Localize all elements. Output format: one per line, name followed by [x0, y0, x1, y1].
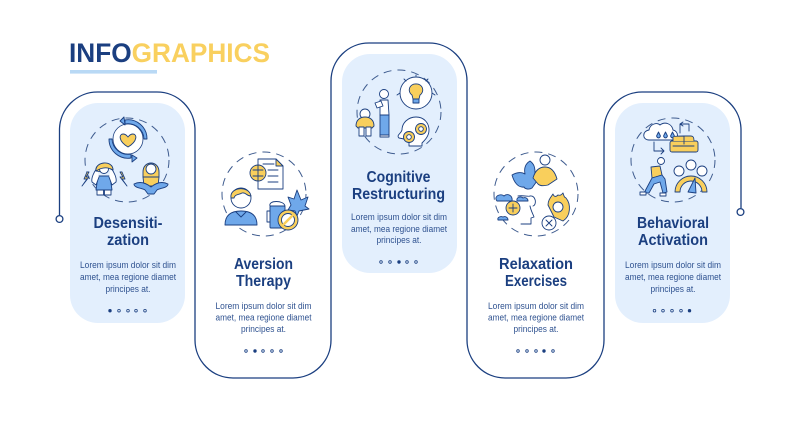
pagination dots — [653, 309, 691, 312]
text block: Lorem ipsum dolor sit dim — [488, 301, 584, 311]
text block: Lorem ipsum dolor sit dim — [216, 301, 312, 311]
text block: principes at. — [514, 324, 558, 334]
text block: principes at. — [376, 235, 422, 245]
text block: principes at. — [106, 284, 150, 294]
panel: Aversion Therapy — [216, 152, 312, 352]
text block — [351, 212, 447, 245]
heading: Behavioral — [637, 215, 709, 232]
heading — [499, 256, 573, 290]
text block: amet, mea regione diamet — [80, 272, 176, 282]
icon: relaxation — [494, 152, 578, 236]
panel: Behavioral Activation — [615, 103, 730, 323]
panel: Cognitive Restructuring — [342, 54, 457, 273]
pagination dots — [380, 261, 417, 263]
heading — [94, 215, 162, 249]
heading: Desensiti- — [94, 215, 162, 232]
icon: desensitization — [82, 117, 169, 202]
title: INFOGRAPHICS — [69, 38, 270, 68]
icon: behavioral — [631, 118, 715, 202]
heading: Restructuring — [352, 186, 445, 203]
heading: Exercises — [505, 273, 567, 290]
heading: zation — [107, 232, 149, 249]
pagination dots — [245, 350, 282, 352]
text block: principes at. — [241, 324, 286, 334]
text block: amet, mea regione diamet — [625, 272, 721, 282]
panel: Relaxation Exercises — [488, 152, 584, 352]
heading: Cognitive — [366, 169, 431, 186]
icon: cognitive — [356, 70, 441, 154]
text block — [625, 260, 721, 294]
heading: Aversion — [234, 256, 293, 273]
heading — [234, 256, 293, 290]
text block: Lorem ipsum dolor sit dim — [625, 260, 721, 270]
text block — [80, 260, 176, 294]
heading — [352, 169, 445, 203]
heading: Therapy — [236, 273, 291, 290]
text block: amet, mea regione diamet — [216, 312, 312, 322]
text block: principes at. — [650, 284, 696, 294]
continuous outline connector — [56, 43, 744, 378]
pagination dots — [109, 309, 146, 312]
panel: Desensitization — [70, 103, 185, 323]
heading: Relaxation — [499, 256, 573, 273]
text block: amet, mea regione diamet — [351, 224, 447, 234]
text block — [216, 301, 312, 334]
text block: amet, mea regione diamet — [488, 312, 584, 322]
pagination dots — [517, 350, 554, 352]
icon: aversion — [222, 152, 309, 236]
heading — [637, 215, 709, 249]
heading: Activation — [638, 232, 708, 249]
text block: Lorem ipsum dolor sit dim — [80, 260, 176, 270]
text block: Lorem ipsum dolor sit dim — [351, 212, 447, 222]
text block — [488, 301, 584, 334]
